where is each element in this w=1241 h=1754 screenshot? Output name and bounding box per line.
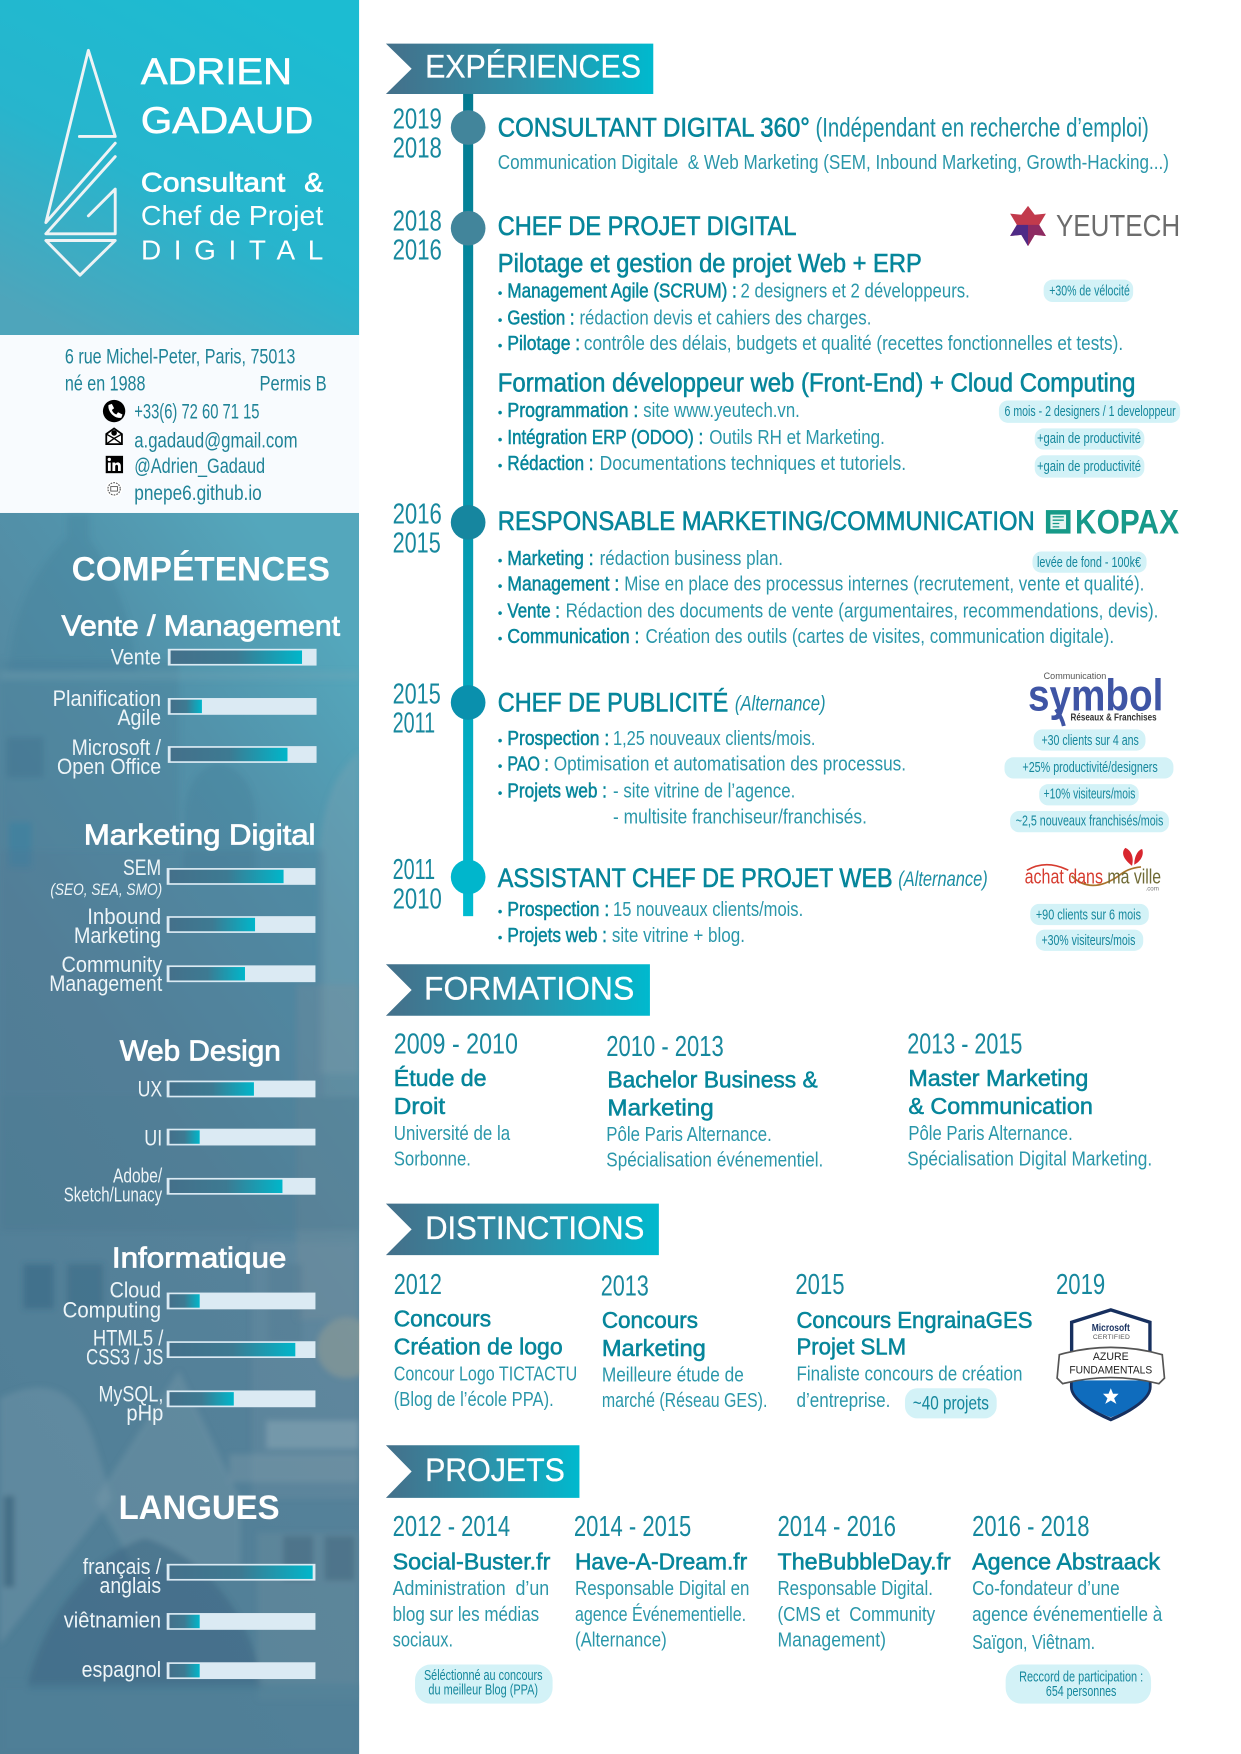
project: have-a-dream: Responsable Digital en [575, 1578, 749, 1600]
project: agence abstraack: Saïgon, Viêtnam. [972, 1632, 1095, 1654]
language: français anglais: anglais [100, 1573, 161, 1598]
years: 2010 [393, 883, 442, 915]
skills group: web design [64, 1035, 315, 1206]
bullet list: rédaction business plan. [600, 548, 783, 570]
job title: Chef de Projet [141, 200, 324, 231]
panel: contact details: a.gadaud@gmail.com [134, 428, 298, 452]
subheading: formation: Formation développeur web (Front-End) + Cloud Computing [498, 370, 1135, 398]
bullet list: • [498, 553, 503, 568]
job title [141, 167, 324, 266]
logo: symbol: Communication [1044, 671, 1106, 681]
bullet list: PAO : [507, 754, 549, 776]
project: have-a-dream: Have-A-Dream.fr [575, 1548, 747, 1574]
years: 2016 [393, 499, 442, 531]
badge: blog: du meilleur Blog (PPA) [428, 1683, 538, 1699]
section banner: formations: FORMATIONS [424, 970, 634, 1006]
bullet list: Optimisation et automatisation des processus. [554, 754, 906, 776]
project: social-buster: Administration d’un [393, 1578, 549, 1600]
subheading: Informatique [112, 1242, 286, 1274]
formation: bachelor: Bachelor Business & [607, 1066, 818, 1092]
bullet list: Prospection : [507, 899, 609, 921]
bullet list: Projets web : [507, 925, 607, 947]
project: have-a-dream: (Alternance) [575, 1630, 667, 1652]
skill: adobe sketch [64, 1165, 315, 1206]
badge: productivité [1005, 757, 1173, 779]
bullet list: pilotage: contrôle des délais, budgets et qualité (recettes fonctionnelles et tests). [584, 333, 1123, 355]
bullet list [498, 728, 906, 828]
bullet list: Création des outils (cartes de visites, communication digitale). [645, 626, 1114, 648]
skill: cloud computing: Computing [63, 1298, 161, 1323]
formation: droit: Étude de [394, 1065, 487, 1091]
badge: franchisés [1010, 811, 1169, 832]
section banner: projets: PROJETS [425, 1452, 565, 1488]
skill: UI [144, 1125, 315, 1150]
badge: projets: ~40 projets [913, 1393, 989, 1414]
distinction: azure certification [1056, 1269, 1164, 1420]
section banner: distinctions [386, 1204, 659, 1255]
language: espagnol [82, 1657, 315, 1682]
skill: planification agile: Agile [117, 705, 161, 730]
formation: bachelor: 2010 - 2013 [606, 1031, 724, 1063]
address: 6 rue Michel-Peter, Paris, 75013 [65, 345, 295, 369]
distinction: marketing: marché (Réseau GES). [602, 1390, 767, 1412]
formation: bachelor: Pôle Paris Alternance. [606, 1124, 772, 1146]
logo: achat dans ma ville: achat dans [1025, 867, 1103, 889]
panel: contact details: +33(6) 72 60 71 15 [134, 399, 260, 423]
job: chef de projet digital [393, 205, 1180, 478]
formation: master: Master Marketing [908, 1065, 1088, 1091]
job: consultant digital [393, 104, 1169, 174]
badge: clients: +90 clients sur 6 mois [1036, 908, 1141, 924]
icon: phone [103, 400, 125, 422]
project: have-a-dream: agence Événementielle. [575, 1603, 746, 1626]
skills group: informatique [63, 1242, 315, 1426]
heading: langues: LANGUES [119, 1489, 280, 1527]
skill: UX [138, 1076, 315, 1101]
skill: inbound marketing: Inbound [87, 904, 161, 929]
icon: github [106, 480, 122, 497]
bullet list: pilotage: • [498, 338, 503, 353]
skill: html css js: CSS3 / JS [86, 1345, 163, 1370]
section banner: expériences: EXPÉRIENCES [425, 49, 641, 85]
distinction: engrainages: 2015 [795, 1269, 845, 1301]
job title: Consultant [141, 167, 286, 197]
bullet list: formation: • [498, 432, 503, 447]
skill: community management: Management [49, 971, 163, 996]
bullet list: • [498, 786, 503, 801]
badge: visiteurs: +10% visiteurs/mois [1044, 787, 1135, 803]
badge: productivité: +25% productivité/designers [1022, 760, 1158, 776]
distinction: engrainages [795, 1269, 1032, 1418]
bullet list: Projets web : [507, 781, 607, 803]
badge: clients [1034, 729, 1145, 751]
bullet list: pilotage: • [498, 312, 503, 327]
distinction: marketing [601, 1270, 767, 1412]
badge: record: 654 personnes [1046, 1684, 1116, 1700]
distinction: azure certification: 2019 [1056, 1269, 1105, 1301]
badge: record: Reccord de participation : [1019, 1669, 1143, 1685]
bullet list: formation: Programmation : [507, 400, 638, 422]
skill: mysql php: pHp [126, 1401, 163, 1426]
icon: azure badge: FUNDAMENTALS [1069, 1365, 1152, 1377]
icon: azure badge [1057, 1310, 1164, 1420]
distinction: marketing: 2013 [601, 1270, 649, 1302]
bullet list: formation: Rédaction : [507, 453, 594, 475]
name [141, 51, 313, 141]
badge: projets [905, 1388, 997, 1418]
language: viêtnamien: viêtnamien [64, 1608, 161, 1633]
skill: mysql php: MySQL, [98, 1382, 163, 1407]
heading: compétences: COMPÉTENCES [72, 549, 330, 589]
badge: franchisés: ~2,5 nouveaux franchisés/mois [1016, 814, 1163, 830]
badge: productivité 2: +gain de productivité [1037, 459, 1141, 475]
job title [498, 112, 1149, 142]
years: 2011 [393, 854, 435, 886]
bullet list: formation [498, 400, 906, 475]
bullet list: pilotage [498, 281, 1123, 355]
bullet list: site vitrine + blog. [612, 925, 745, 947]
icon: azure badge: Microsoft [1092, 1323, 1130, 1334]
skill: inbound marketing: Marketing [74, 923, 161, 948]
logo: kopax [1046, 504, 1179, 542]
subheading: Vente / Management [62, 610, 340, 642]
job title: & [304, 167, 323, 197]
formation: bachelor: Spécialisation événementiel. [606, 1150, 823, 1172]
badge: clients: +30 clients sur 4 ans [1041, 733, 1139, 749]
bullet list: • [498, 930, 503, 945]
skills group: marketing digital [49, 820, 315, 996]
panel: sidebar header [0, 0, 359, 335]
project: social-buster: blog sur les médias [393, 1604, 539, 1626]
section banner: projets [386, 1445, 579, 1498]
bullet list: • [498, 733, 503, 748]
job title: DIGITAL [141, 235, 323, 266]
distinction: marketing: Meilleure étude de [602, 1364, 744, 1386]
bullet list: pilotage: Pilotage : [507, 333, 580, 355]
bullet list [498, 548, 1158, 648]
badge: blog: Séléctionné au concours [424, 1668, 543, 1684]
skill: adobe sketch: Sketch/Lunacy [64, 1184, 163, 1206]
badge: vélocité [1044, 280, 1133, 302]
bullet list: pilotage: • [498, 286, 503, 301]
languages chart [64, 1554, 315, 1682]
project: have-a-dream [574, 1511, 749, 1652]
bullet list: formation: Documentations techniques et tutoriels. [600, 453, 906, 475]
project: thebubbleday [777, 1511, 951, 1652]
distinction: engrainages: d’entreprise. [796, 1390, 890, 1412]
job title: CHEF DE PROJET DIGITAL [498, 211, 797, 241]
skill: planification agile [53, 686, 317, 730]
distinction: logo: 2012 [394, 1269, 442, 1301]
icon: azure badge: CERTIFIED [1093, 1334, 1130, 1341]
badge: record [1006, 1665, 1151, 1704]
formation: droit [394, 1029, 518, 1171]
panel: sidebar background photo [0, 513, 377, 1754]
years: 2015 [393, 679, 441, 711]
formation: master: & Communication [908, 1093, 1093, 1119]
years: 2016 [393, 235, 442, 267]
bullet list: - multisite franchiseur/franchisés. [613, 806, 867, 828]
formation: droit: Sorbonne. [394, 1149, 471, 1171]
formation: bachelor [606, 1031, 823, 1172]
badge: visiteurs: +30% visiteurs/mois [1041, 933, 1135, 949]
project: agence abstraack: 2016 - 2018 [972, 1511, 1090, 1543]
logo: symbol: symbol [1028, 670, 1163, 720]
icon: azure badge: AZURE [1093, 1351, 1129, 1363]
project: agence abstraack: agence événementielle à [972, 1604, 1163, 1626]
skill: inbound marketing [74, 904, 315, 948]
job title: CONSULTANT DIGITAL 360° [498, 112, 810, 142]
skill: html css js [86, 1326, 315, 1370]
badge: équipe: 6 mois - 2 designers / 1 developpeur [1005, 404, 1176, 420]
project: have-a-dream: 2014 - 2015 [574, 1511, 691, 1543]
project: thebubbleday: Management) [777, 1630, 886, 1652]
skill: SEM [50, 855, 315, 899]
badge: productivité 1: +gain de productivité [1037, 431, 1141, 447]
distinction: marketing: Concours [602, 1307, 698, 1333]
subheading: pilotage: Pilotage et gestion de projet Web + ERP [498, 250, 922, 278]
bullet list: Management : [507, 574, 619, 596]
bullet list: pilotage: Management Agile (SCRUM) : [507, 281, 737, 303]
skill: community management: Community [62, 952, 163, 977]
formation: droit: Droit [394, 1093, 446, 1119]
job title: ASSISTANT CHEF DE PROJET WEB [498, 863, 893, 893]
bullet list: • [498, 631, 503, 646]
address [65, 345, 327, 395]
skill: SEM: SEM [123, 855, 161, 880]
name: ADRIEN [141, 51, 292, 92]
logo: achat dans ma ville: ma ville [1107, 867, 1161, 889]
badge: productivité 1 [1035, 428, 1144, 450]
years [393, 499, 442, 560]
panel: contact details [0, 335, 359, 513]
distinction: logo: (Blog de l’école PPA). [394, 1389, 554, 1411]
skill: community management [49, 952, 315, 996]
section banner: expériences [386, 44, 653, 94]
formation: master: Pôle Paris Alternance. [908, 1123, 1073, 1145]
project: thebubbleday: Responsable Digital. [777, 1578, 933, 1600]
formation: droit: Université de la [394, 1123, 511, 1145]
distinction: engrainages: Concours EngrainaGES [796, 1307, 1032, 1333]
job: assistant chef de projet web [393, 848, 1161, 951]
badge: clients [1030, 904, 1149, 925]
project: agence abstraack: Co-fondateur d’une [972, 1578, 1120, 1600]
job title: (Alternance) [898, 867, 988, 891]
skill: vente [111, 644, 317, 669]
address: Permis B [260, 371, 327, 395]
subheading: Marketing Digital [84, 820, 315, 852]
project: thebubbleday: (CMS et Community [777, 1604, 936, 1626]
section banner: formations [386, 964, 650, 1016]
bullet list [498, 899, 803, 947]
job title: RESPONSABLE MARKETING/COMMUNICATION [498, 506, 1035, 536]
badge: visiteurs [1036, 930, 1143, 951]
skill: planification agile: Planification [53, 686, 161, 711]
formation: bachelor: Marketing [607, 1094, 714, 1120]
bullet list: 15 nouveaux clients/mois. [613, 899, 803, 921]
skill: UI: UI [144, 1125, 162, 1150]
years: 2019 [393, 104, 442, 136]
section banner: distinctions: DISTINCTIONS [425, 1210, 644, 1246]
project: social-buster: sociaux. [393, 1630, 453, 1652]
bullet list: Mise en place des processus internes (recrutement, vente et qualité). [624, 574, 1144, 596]
job title: (Indépendant en recherche d’emploi) [815, 112, 1149, 142]
logo: achat dans ma ville: .com [1145, 885, 1159, 892]
bullet list: - site vitrine de l’agence. [613, 781, 795, 803]
project: social-buster [393, 1511, 553, 1704]
project: thebubbleday: TheBubbleDay.fr [777, 1548, 951, 1574]
logo: achat dans ma ville [1025, 848, 1161, 892]
badge: productivité 2 [1035, 455, 1144, 478]
bullet list: • [498, 904, 503, 919]
formation: droit: 2009 - 2010 [394, 1029, 518, 1061]
bullet list: Marketing : [507, 548, 594, 570]
skill: UX: UX [138, 1076, 162, 1101]
distinction: engrainages: Projet SLM [796, 1334, 906, 1360]
skill: cloud computing: Cloud [110, 1278, 161, 1303]
bullet list: 1,25 nouveaux clients/mois. [613, 728, 815, 750]
badge: équipe [999, 400, 1180, 423]
job title: (Alternance) [735, 691, 826, 715]
years: 2018 [393, 205, 442, 237]
bullet list: pilotage: rédaction devis et cahiers des charges. [579, 307, 871, 329]
bullet list: pilotage: Gestion : [507, 307, 575, 329]
subheading: Web Design [120, 1035, 281, 1067]
badge: levée de fond [1032, 551, 1147, 573]
distinction: marketing: Marketing [602, 1335, 706, 1361]
bullet list: formation: • [498, 405, 503, 420]
bullet list: formation: site www.yeutech.vn. [643, 400, 800, 422]
distinction: logo: Création de logo [394, 1334, 563, 1360]
badge: visiteurs [1039, 784, 1139, 805]
job: chef de publicité [393, 670, 1173, 832]
bullet list: Prospection : [507, 728, 609, 750]
panel: contact details: @Adrien_Gadaud [134, 454, 265, 478]
skill: microsoft: Open Office [57, 754, 161, 779]
panel: contact details: pnepe6.github.io [134, 481, 262, 505]
language: français anglais [83, 1554, 315, 1598]
badge: blog [415, 1665, 553, 1704]
icon: linkedin [106, 456, 123, 473]
timeline [451, 94, 485, 916]
job: responsable marketing [393, 499, 1179, 648]
address: né en 1988 [65, 371, 145, 395]
skills group: vente et management [53, 610, 340, 779]
years: 2015 [393, 528, 441, 560]
language: espagnol: espagnol [82, 1657, 161, 1682]
project: agence abstraack: Agence Abstraack [972, 1548, 1160, 1574]
bullet list: Communication : [507, 626, 639, 648]
project: agence abstraack [972, 1511, 1163, 1704]
logo: kopax: KOPAX [1075, 504, 1179, 542]
years [393, 679, 441, 740]
bullet list: • [498, 759, 503, 774]
formation: master [907, 1029, 1152, 1171]
skill: microsoft: Microsoft / [72, 735, 162, 760]
badge: levée de fond: levée de fond - 100k€ [1037, 555, 1141, 571]
bullet list: pilotage: 2 designers et 2 développeurs. [741, 281, 970, 303]
language: français anglais: français / [83, 1554, 162, 1579]
distinction: engrainages: Finaliste concours de création [796, 1363, 1022, 1385]
skill: SEM: (SEO, SEA, SMO) [50, 880, 162, 899]
years [393, 205, 442, 267]
badge: vélocité: +30% de vélocité [1049, 283, 1130, 299]
project: thebubbleday: 2014 - 2016 [777, 1511, 896, 1543]
years: 2018 [393, 133, 442, 165]
skill: microsoft [57, 735, 317, 779]
skill: cloud computing [63, 1278, 315, 1323]
project: social-buster: Social-Buster.fr [393, 1548, 551, 1574]
bullet list: Vente : [507, 600, 560, 622]
years [393, 854, 442, 915]
skill: mysql php [98, 1382, 315, 1426]
skill: html css js: HTML5 / [93, 1326, 164, 1351]
skill: adobe sketch: Adobe/ [113, 1165, 163, 1187]
distinction: logo: Concours [394, 1306, 491, 1332]
language: viêtnamien [64, 1608, 315, 1633]
bullet list: • [498, 605, 503, 620]
icon: tie logo [46, 50, 115, 275]
distinction: logo [394, 1269, 577, 1411]
logo: yeutech: YEUTECH [1056, 210, 1180, 243]
icon: envelope [106, 428, 122, 444]
formation: master: Spécialisation Digital Marketing. [907, 1149, 1152, 1171]
years [393, 104, 442, 165]
job title: CHEF DE PUBLICITÉ [498, 687, 728, 717]
bullet list: formation: Outils RH et Marketing. [709, 427, 885, 449]
logo: symbol: Réseaux & Franchises [1071, 712, 1157, 723]
years: 2011 [393, 708, 435, 740]
formation: master: 2013 - 2015 [907, 1029, 1022, 1061]
bullet list: • [498, 579, 503, 594]
bullet list: formation: • [498, 458, 503, 473]
bullet list: formation: Intégration ERP (ODOO) : [507, 427, 703, 449]
skill: vente: Vente [111, 644, 161, 669]
project: social-buster: 2012 - 2014 [393, 1511, 510, 1543]
name: GADAUD [141, 100, 313, 141]
logo: yeutech [1010, 206, 1180, 246]
distinction: logo: Concour Logo TICTACTU [394, 1363, 577, 1385]
